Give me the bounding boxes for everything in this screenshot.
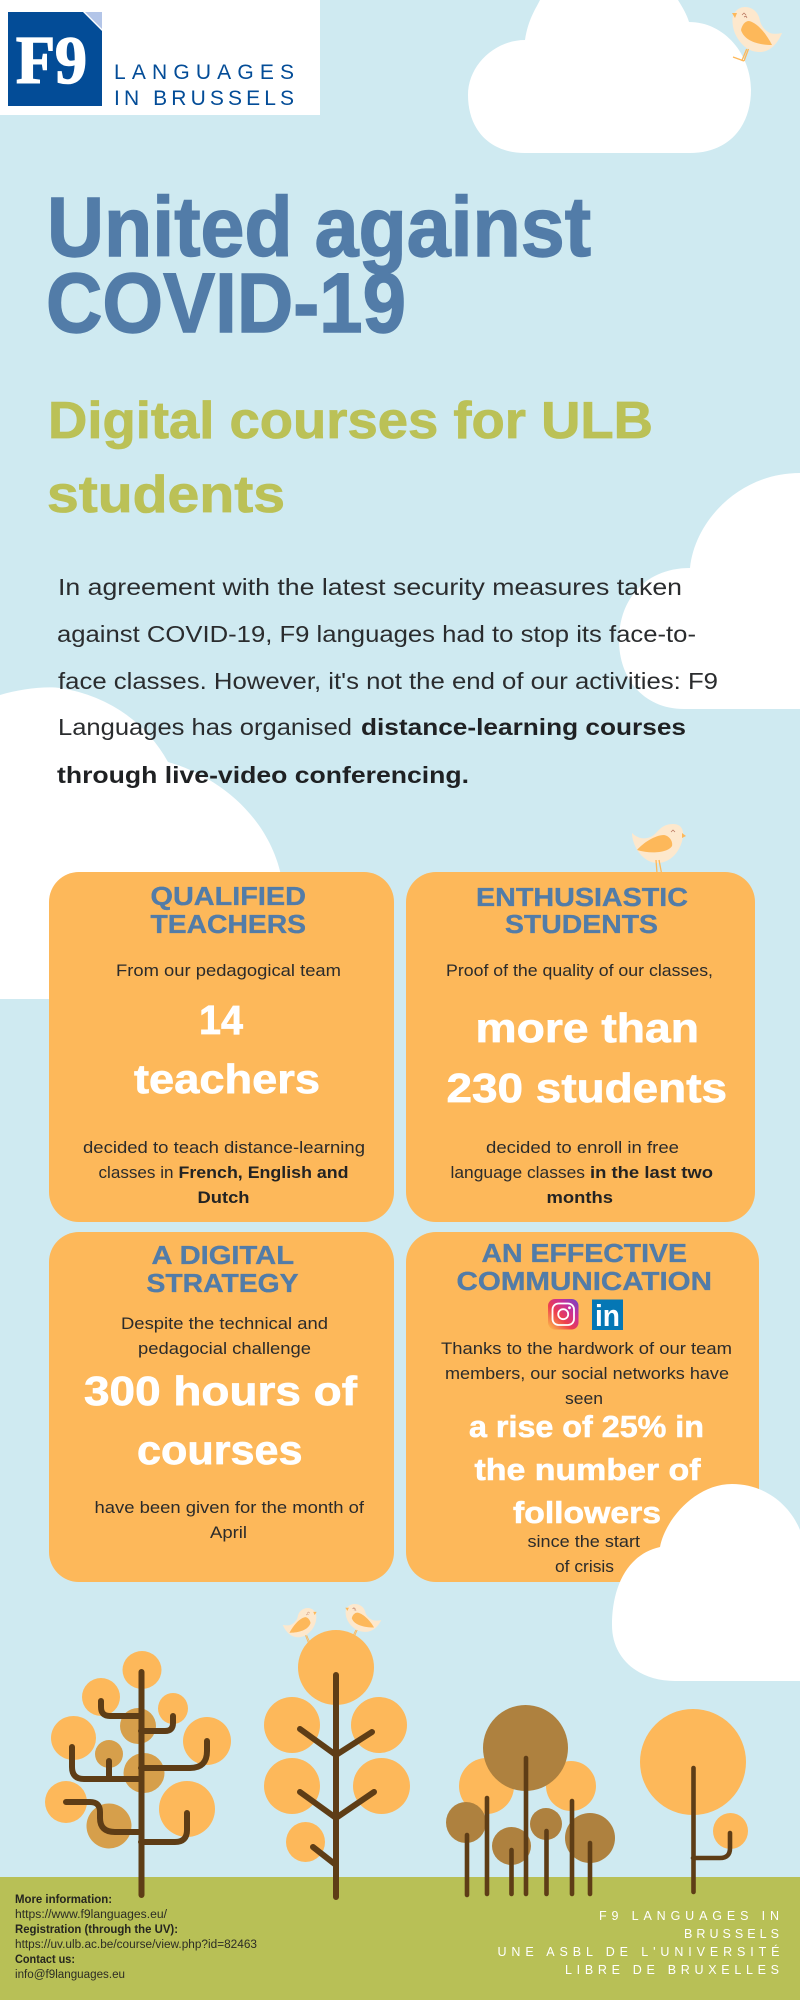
subtitle: students bbox=[47, 466, 285, 524]
text: despite the challenge: Despite the technical and bbox=[121, 1315, 328, 1333]
heading: an effective communication bbox=[456, 1238, 712, 1296]
stat: rise of 25% in followers: the number of bbox=[474, 1452, 701, 1487]
stat: 300 hours of courses bbox=[84, 1368, 357, 1473]
text: decided to teach: French, English and bbox=[178, 1164, 348, 1182]
footer: organisation tagline bbox=[498, 1909, 780, 1977]
panel: qualified teachers bbox=[49, 872, 394, 1222]
heading: qualified teachers bbox=[150, 881, 306, 939]
icon: linkedin: in bbox=[595, 1298, 620, 1333]
cloud: top right bbox=[468, 0, 751, 153]
intro paragraph: In agreement with the latest security measures taken bbox=[58, 574, 682, 600]
heading: a digital strategy: STRATEGY bbox=[146, 1268, 298, 1298]
ground bbox=[0, 1877, 800, 2000]
text: decided to teach bbox=[83, 1139, 365, 1207]
stat: more than 230 students: 230 students bbox=[446, 1065, 727, 1111]
heading: a digital strategy: A DIGITAL bbox=[152, 1240, 294, 1270]
text: thanks to the hardwork: Thanks to the hardwork of our team bbox=[441, 1340, 732, 1358]
heading: an effective communication: AN EFFECTIVE bbox=[482, 1238, 687, 1268]
cloud: middle right bbox=[619, 473, 800, 709]
icon: instagram bbox=[548, 1299, 578, 1330]
text: decided to enroll: decided to enroll in free bbox=[486, 1139, 679, 1157]
heading: an effective communication: COMMUNICATION bbox=[456, 1266, 712, 1296]
footer: contact information bbox=[15, 1894, 257, 1981]
stat: more than 230 students: more than bbox=[476, 1005, 699, 1051]
text: decided to enroll: language classes bbox=[450, 1164, 585, 1182]
stat: 14 teachers: teachers bbox=[134, 1056, 320, 1102]
text: since the start of crisis: of crisis bbox=[555, 1558, 614, 1576]
intro paragraph: through live-video conferencing. bbox=[57, 762, 469, 788]
stat: rise of 25% in followers: followers bbox=[513, 1495, 661, 1530]
subtitle bbox=[47, 392, 653, 524]
text: since the start of crisis bbox=[528, 1533, 640, 1576]
subtitle: Digital courses for ULB bbox=[48, 392, 653, 450]
text: month of April: have been given for the month of bbox=[94, 1499, 364, 1517]
icon: bird right on tree bbox=[345, 1604, 381, 1637]
footer: organisation tagline: F9 LANGUAGES IN bbox=[599, 1909, 779, 1923]
stat: more than 230 students bbox=[446, 1005, 727, 1111]
title bbox=[46, 180, 591, 350]
cloud: bottom right bbox=[612, 1484, 800, 1681]
heading: qualified teachers: QUALIFIED bbox=[150, 881, 306, 911]
stat: rise of 25% in followers: a rise of 25% in bbox=[469, 1409, 704, 1444]
footer: contact information: Registration (through the UV): bbox=[15, 1924, 178, 1936]
intro paragraph: distance-learning courses bbox=[361, 714, 686, 740]
footer: contact information: More information: bbox=[15, 1894, 112, 1906]
text: decided to teach: classes in bbox=[98, 1164, 174, 1182]
text: proof of quality: Proof of the quality of our classes, bbox=[446, 962, 713, 980]
footer: contact information: info@f9languages.eu bbox=[15, 1969, 125, 1981]
intro paragraph: Languages has organised bbox=[58, 714, 352, 740]
text: despite the challenge bbox=[121, 1315, 328, 1358]
footer: contact information: Contact us: bbox=[15, 1954, 75, 1966]
stat: 300 hours of courses: 300 hours of bbox=[84, 1368, 357, 1414]
footer: contact information: https://uv.ulb.ac.be/course/view.php?id=82463 bbox=[15, 1939, 257, 1951]
text: decided to teach: decided to teach distance-learning bbox=[83, 1139, 365, 1157]
icon: bird left on tree bbox=[283, 1608, 317, 1643]
text: since the start of crisis: since the start bbox=[528, 1533, 640, 1551]
logo: F9 Languages in Brussels: F9 bbox=[16, 22, 87, 98]
footer: organisation tagline: UNE ASBL DE L'UNIVERSITÉ bbox=[498, 1944, 780, 1959]
intro paragraph: face classes. However, it's not the end of our activities: F9 bbox=[58, 668, 718, 694]
footer: organisation tagline: BRUSSELS bbox=[684, 1927, 779, 1941]
cloud: middle left bbox=[0, 687, 282, 999]
panel: a digital strategy bbox=[49, 1232, 394, 1582]
tree 2: symmetric tree bbox=[264, 1630, 410, 1897]
intro paragraph: against COVID-19, F9 languages had to stop its face-to- bbox=[57, 621, 696, 647]
panel: enthusiastic students bbox=[406, 872, 755, 1222]
text: thanks to the hardwork: seen bbox=[565, 1390, 603, 1408]
logo: F9 Languages in Brussels: IN BRUSSELS bbox=[114, 87, 294, 110]
text: decided to teach: Dutch bbox=[198, 1189, 250, 1207]
heading: enthusiastic students: ENTHUSIASTIC bbox=[476, 882, 688, 912]
icon: bird on card bbox=[632, 824, 686, 873]
stat: 14 teachers bbox=[134, 997, 320, 1102]
text: decided to enroll: in the last two bbox=[590, 1164, 713, 1182]
heading: enthusiastic students: STUDENTS bbox=[505, 909, 658, 939]
panel: an effective communication bbox=[406, 1232, 759, 1582]
title: COVID-19 bbox=[46, 256, 406, 350]
text: decided to enroll: months bbox=[546, 1189, 613, 1207]
intro paragraph bbox=[57, 574, 718, 788]
text: thanks to the hardwork: members, our social networks have bbox=[445, 1365, 729, 1383]
stat: rise of 25% in followers bbox=[469, 1409, 704, 1530]
logo: F9 Languages in Brussels bbox=[0, 0, 320, 115]
text: thanks to the hardwork bbox=[441, 1340, 732, 1408]
text: month of April: April bbox=[210, 1524, 247, 1542]
stat: 14 teachers: 14 bbox=[199, 997, 243, 1043]
text: month of April bbox=[94, 1499, 364, 1542]
text: from our pedagogical team: From our pedagogical team bbox=[116, 962, 341, 980]
footer: organisation tagline: LIBRE DE BRUXELLES bbox=[565, 1963, 779, 1977]
heading: a digital strategy bbox=[146, 1240, 298, 1298]
text: decided to enroll bbox=[450, 1139, 713, 1207]
text: despite the challenge: pedagocial challenge bbox=[138, 1340, 311, 1358]
footer: contact information: https://www.f9languages.eu/ bbox=[15, 1909, 168, 1921]
heading: enthusiastic students bbox=[476, 882, 688, 939]
title: United against bbox=[47, 180, 591, 274]
heading: qualified teachers: TEACHERS bbox=[150, 909, 306, 939]
tree 3: grove of thin trees bbox=[446, 1705, 615, 1895]
tree 4: round tree bbox=[640, 1709, 748, 1892]
stat: 300 hours of courses: courses bbox=[137, 1427, 302, 1473]
icon: bird on top cloud bbox=[732, 7, 782, 61]
logo: F9 Languages in Brussels: LANGUAGES bbox=[114, 61, 294, 84]
tree 1: branching tree bbox=[45, 1651, 231, 1895]
